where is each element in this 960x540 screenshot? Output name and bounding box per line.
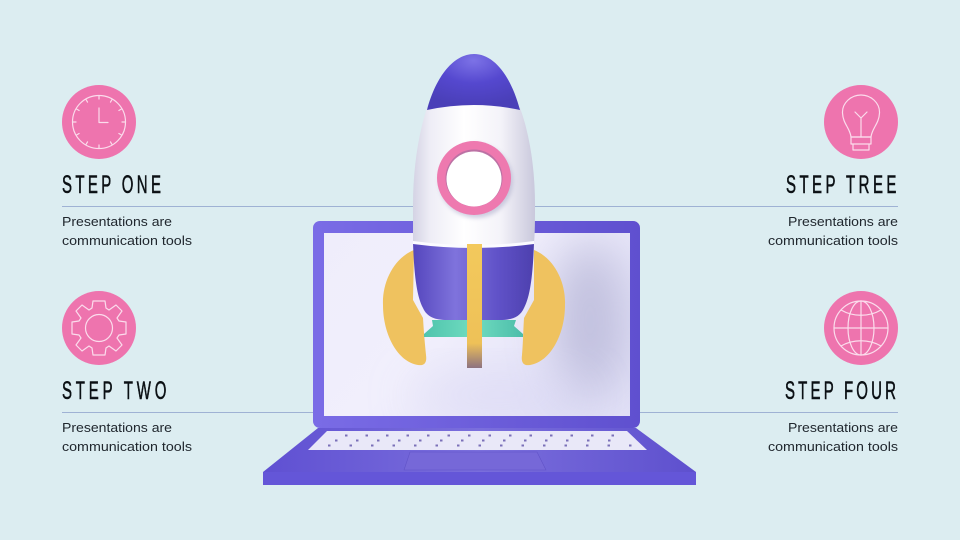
rocket white body [413,102,535,246]
heading: step two: STEP TWO [62,377,166,405]
panel: step four [768,291,899,454]
rocket lower body [413,243,534,320]
icon: clock [62,85,136,159]
rocket side fins [383,250,565,365]
divider lines [62,206,898,412]
text: step four description [768,420,899,454]
heading: step one: STEP ONE [62,171,161,199]
icon: light bulb [824,85,898,159]
icon: gear [62,291,136,365]
text: step four description: Presentations are [788,420,898,435]
icon: globe [824,291,898,365]
rocket center fin [467,244,482,368]
text: step three description: communication tools [768,233,899,248]
text: step three description: Presentations are [788,214,898,229]
text: step one description: communication tools [62,233,193,248]
laptop base [263,428,696,485]
text: step two description [62,420,193,454]
text: step four description: communication tools [768,439,899,454]
text: step three description [768,214,899,248]
rocket [383,54,565,368]
laptop screen [313,221,640,428]
rocket window [437,141,513,218]
panel: step three [768,85,899,248]
text: step two description: Presentations are [62,420,172,435]
trackpad [404,452,546,470]
heading: step four: STEP FOUR [785,377,896,405]
panel: step one [62,85,193,248]
laptop [263,221,696,485]
keyboard [308,431,647,450]
rocket exhaust ring [424,320,523,337]
rocket nose cone [427,54,520,110]
text: step two description: communication tools [62,439,193,454]
text: step one description: Presentations are [62,214,172,229]
rocket body stripe [413,241,534,248]
panel: step two [62,291,193,454]
text: step one description [62,214,193,248]
heading: step three: STEP TREE [786,171,896,199]
